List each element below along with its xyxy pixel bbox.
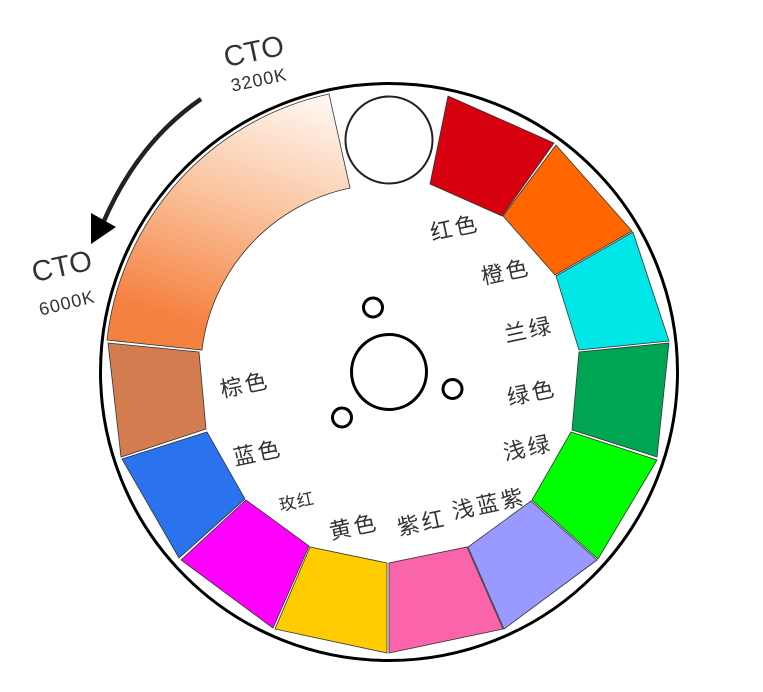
segment: red xyxy=(430,96,554,216)
segment: orange xyxy=(503,145,632,275)
outer wheel ring xyxy=(100,84,678,660)
segment: pink xyxy=(389,547,503,653)
label: yellow: 黄色 xyxy=(327,510,381,544)
label: CTO top: CTO xyxy=(221,30,287,74)
label: 6000K: 6000K xyxy=(37,286,97,320)
open aperture circle xyxy=(346,96,432,184)
label: CTO bottom: CTO xyxy=(29,245,95,289)
segment: dark green xyxy=(572,343,669,457)
label: magenta: 玫红 xyxy=(277,489,317,515)
centre hub circle xyxy=(352,334,426,410)
mounting hole top xyxy=(364,298,382,317)
mounting hole left xyxy=(332,408,352,427)
segment: yellow xyxy=(275,547,387,653)
segment: brown xyxy=(108,343,206,457)
mounting hole right xyxy=(443,380,462,398)
segment: blue xyxy=(122,432,245,558)
label: blue: 蓝色 xyxy=(231,436,285,470)
label: lavender: 浅蓝紫 xyxy=(450,484,528,524)
label: orange: 橙色 xyxy=(479,255,533,289)
segment: cyan xyxy=(556,232,669,350)
label: bright green: 浅绿 xyxy=(501,431,555,465)
segment: magenta xyxy=(181,500,309,628)
arrow: CTO direction xyxy=(91,99,201,244)
label: cyan: 兰绿 xyxy=(502,313,556,347)
label: brown: 棕色 xyxy=(218,368,272,402)
label: 3200K: 3200K xyxy=(229,64,289,96)
label: pink: 紫红 xyxy=(395,506,449,540)
label: red: 红色 xyxy=(428,211,482,245)
segment: bright green xyxy=(532,432,657,559)
segment: lavender xyxy=(468,501,597,629)
segment: CTO gradient xyxy=(107,94,350,350)
label: dark green: 绿色 xyxy=(505,376,559,410)
